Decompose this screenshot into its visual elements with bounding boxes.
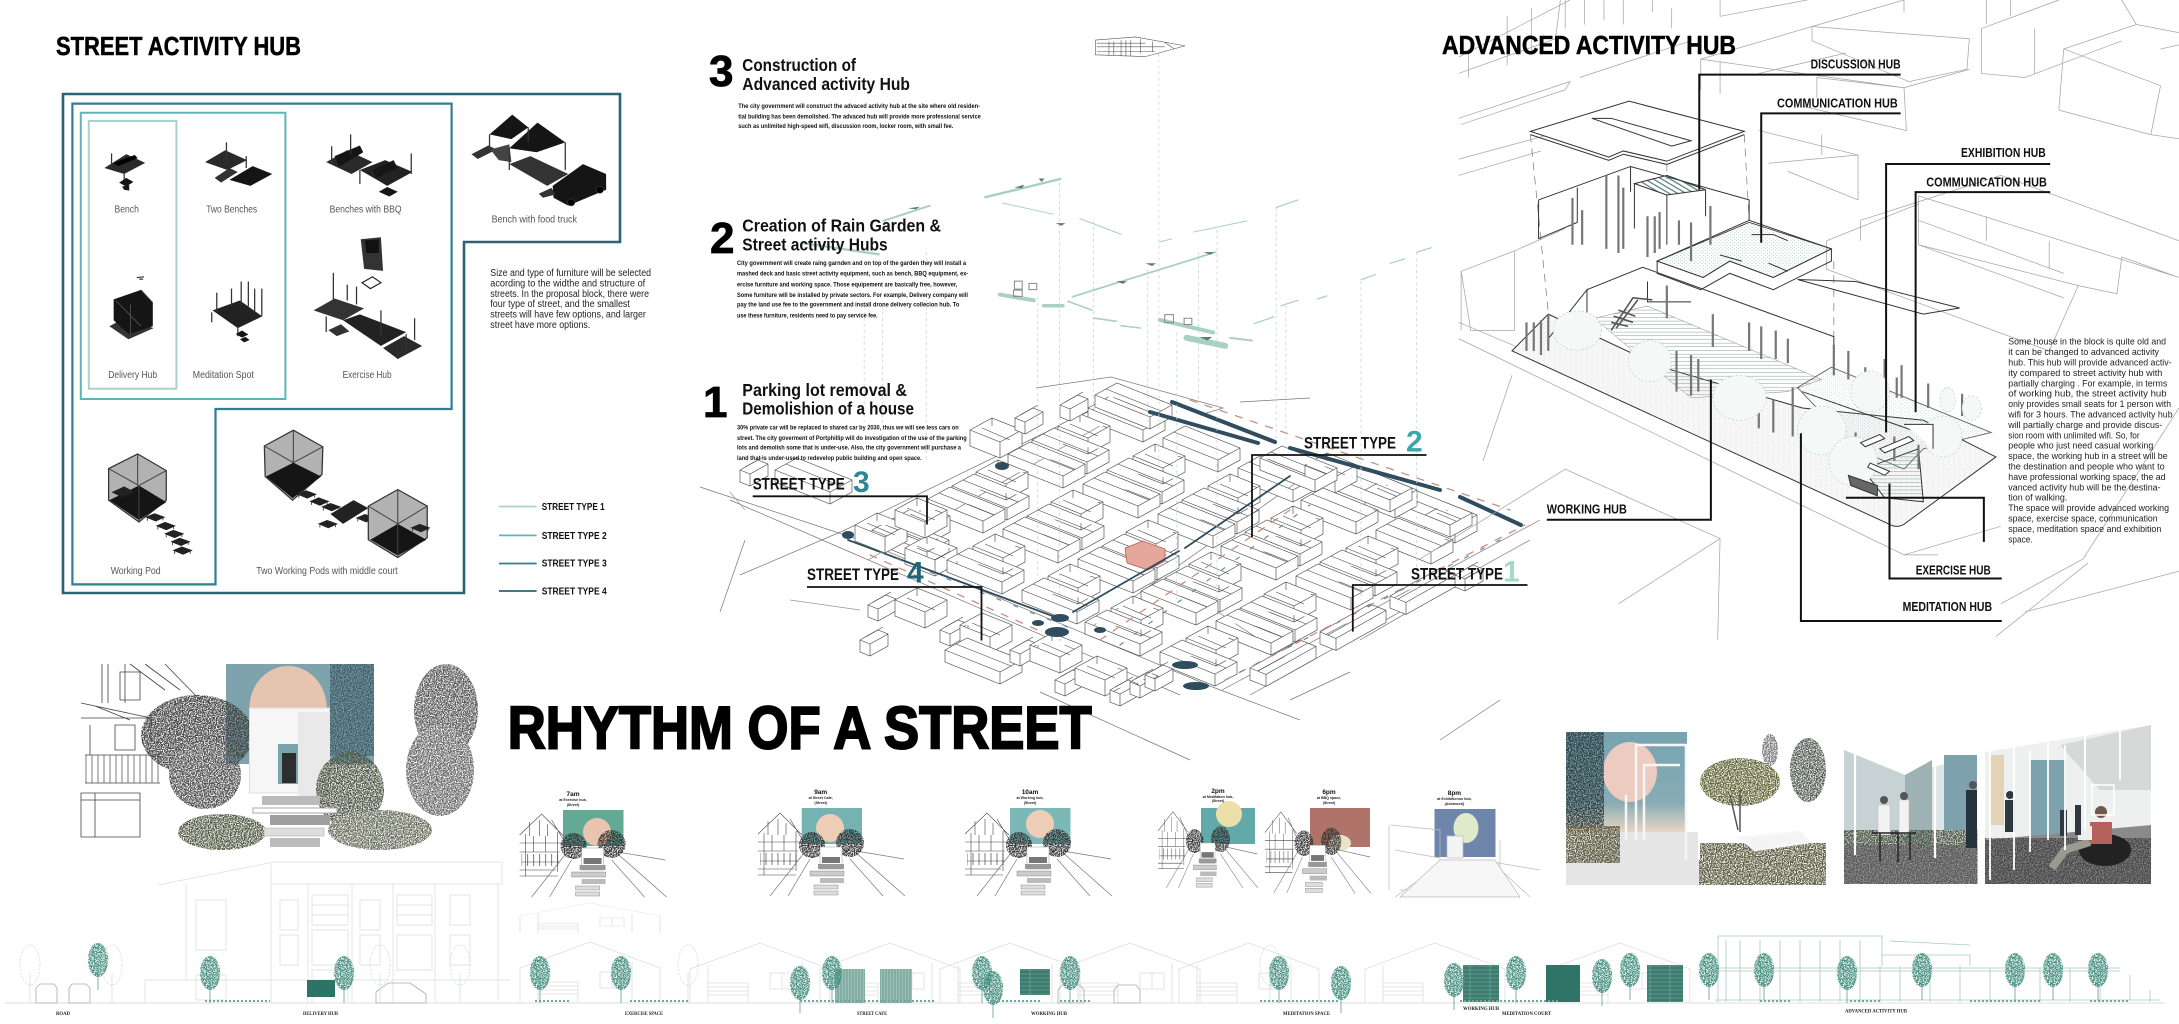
section labels: STREET CAFE bbox=[857, 1012, 888, 1017]
panel: street elevation bbox=[5, 862, 2165, 1018]
text block: advanced hub description: people who just need casual working bbox=[2008, 441, 2153, 451]
section labels: DELIVERY HUB bbox=[303, 1012, 339, 1017]
legend: street types bbox=[499, 501, 607, 598]
map ghost boundary and road lines bbox=[700, 377, 1540, 760]
callout: street type 1 bbox=[1353, 556, 1528, 632]
text block: advanced hub description bbox=[2007, 337, 2173, 544]
scene: 10am working hub: (Street) bbox=[1024, 801, 1037, 805]
parking road segments bbox=[848, 400, 1525, 680]
stairs bbox=[1611, 298, 1652, 330]
green garden strips bbox=[804, 179, 1431, 346]
buildings: western blocks bbox=[740, 383, 1172, 553]
callout: street type 4: 4 bbox=[907, 556, 924, 590]
trees bbox=[1553, 311, 1981, 486]
step 2: rain garden and street activity hubs: City government will create raing garnden and on top of the garden they will install a bbox=[737, 261, 967, 267]
upper floor walls and hatch box bbox=[1539, 166, 1960, 314]
hub callout labels: MEDITATION HUB bbox=[1903, 600, 1992, 614]
section labels: WORKING HUB bbox=[1463, 1007, 1500, 1012]
section labels: ADVANCED ACTIVITY HUB bbox=[1845, 1010, 1908, 1014]
step 3: construction of advanced activity hub: The city government will construct the advaced activity hub at the site where old residen- bbox=[738, 104, 980, 110]
text block: advanced hub description: the destination and people who want to bbox=[2008, 462, 2165, 472]
teal trees bbox=[88, 943, 2108, 1018]
step 2: rain garden and street activity hubs: pay the land use fee to the government and install drone delivery collecion hub. To bbox=[737, 303, 960, 309]
callout: street type 3: 3 bbox=[853, 466, 870, 499]
icon: delivery hub bbox=[109, 277, 154, 339]
text block: furniture selection: four type of street, and the smallest bbox=[490, 299, 630, 310]
text block: advanced hub description: vanced activity hub will be the destina- bbox=[2008, 482, 2161, 492]
text block: furniture selection: streets. In the proposal block, there were bbox=[490, 289, 649, 300]
panel: street type nested frames bbox=[63, 94, 620, 593]
text block: advanced hub description: Some house in the block is quite old and bbox=[2008, 337, 2166, 347]
text block: furniture selection: street have more options. bbox=[490, 320, 590, 331]
sky panel with peach arch bbox=[226, 664, 374, 764]
icon: exercise hub bbox=[314, 237, 422, 359]
text block: advanced hub description: it can be changed to advanced activity bbox=[2008, 347, 2159, 357]
step 2: rain garden and street activity hubs bbox=[710, 214, 968, 319]
small advanced hub at top bbox=[1095, 37, 1185, 57]
scene: 6pm bbq space: at BBQ space, bbox=[1317, 796, 1341, 800]
section labels: WORKING HUB bbox=[1031, 1012, 1068, 1017]
text block: furniture selection: acording to the widthe and structure of bbox=[490, 278, 645, 289]
dark columnar tree bbox=[330, 664, 374, 756]
buildings: eastern block rows bbox=[1085, 446, 1477, 686]
callout: street type 2: STREET TYPE bbox=[1304, 434, 1396, 453]
furniture bbox=[1720, 235, 1933, 496]
scene: 7am exercise hub: (Street) bbox=[567, 803, 580, 807]
scene: 9am street cafe: (Street) bbox=[814, 801, 828, 805]
icon labels: Working Pod bbox=[111, 566, 161, 577]
background figures bbox=[2005, 791, 2081, 836]
icon labels: Bench with food truck bbox=[492, 215, 578, 226]
step 1: parking lot removal and demolition bbox=[703, 378, 967, 462]
white frames and bench bbox=[1626, 745, 1810, 860]
section labels: ROAD bbox=[56, 1012, 70, 1017]
buildings: southern houses strip bbox=[860, 562, 1483, 706]
hub callout labels: DISCUSSION HUB bbox=[1811, 58, 1901, 72]
scene: 2pm meditation hub: 2pm bbox=[1211, 788, 1225, 795]
step 1: parking lot removal and demolition: street. The city goverment of Portphillip will do investigation of the use of the parking bbox=[737, 436, 967, 442]
text block: advanced hub description: wifi for 3 hours. The advanced activity hub bbox=[2007, 410, 2173, 420]
icon labels: Two Working Pods with middle court bbox=[256, 566, 398, 577]
icon labels: Meditation Spot bbox=[193, 370, 254, 381]
step 1: parking lot removal and demolition: Demolishion of a house bbox=[742, 399, 914, 419]
text block: advanced hub description: of working hub, the street activity hub bbox=[2008, 389, 2167, 399]
step 2: rain garden and street activity hubs: Street activity Hubs bbox=[742, 235, 888, 255]
panel: advanced activity hub axonometric bbox=[1420, 0, 2179, 640]
icon: two benches bbox=[205, 142, 272, 186]
step 2: rain garden and street activity hubs: Some furniture will be installed by private sectors. For example, Delivery company will bbox=[737, 293, 968, 299]
scene: 10am working hub: at Working hub, bbox=[1016, 796, 1044, 800]
scene: 2pm meditation hub bbox=[1158, 788, 1258, 888]
icon labels: Two Benches bbox=[206, 204, 257, 215]
icon: working pod bbox=[109, 454, 193, 555]
callout: street type 2 bbox=[1252, 426, 1426, 537]
scene: 6pm bbq space: (Street) bbox=[1323, 801, 1336, 805]
panel: isometric block map bbox=[700, 377, 1540, 760]
step 3: construction of advanced activity hub: Construction of bbox=[742, 55, 856, 75]
frame: street type 4 bbox=[63, 94, 620, 593]
image: advanced hub interior left bbox=[1844, 704, 1984, 884]
sky gradient bbox=[1566, 732, 1687, 833]
hub callout labels bbox=[1547, 58, 2047, 614]
icon: meditation spot bbox=[212, 282, 262, 342]
scene: 6pm bbq space bbox=[1265, 789, 1371, 893]
line-drawn neighbouring house bbox=[81, 664, 200, 837]
scene: 10am working hub bbox=[965, 789, 1112, 896]
ground floor walls and hatch bbox=[1548, 267, 1991, 502]
scene: 2pm meditation hub: at Meditation hub, bbox=[1203, 795, 1233, 799]
leader lines bbox=[1547, 75, 2050, 621]
icon: bench bbox=[104, 153, 145, 191]
dashed projection lines bbox=[1530, 135, 1834, 339]
callout: street type 3 bbox=[753, 466, 927, 524]
shrubs left bbox=[1566, 826, 1620, 863]
right grey tree bbox=[406, 664, 478, 816]
roof slab bbox=[1530, 101, 1744, 164]
step 2: rain garden and street activity hubs: 2 bbox=[710, 214, 734, 263]
text block: advanced hub description: space. bbox=[2008, 534, 2033, 544]
step 2: rain garden and street activity hubs: use these furniture, residents need to pay service fee. bbox=[737, 313, 878, 319]
step 2: rain garden and street activity hubs: mashed deck and basic street activity equipment, such as bench, BBQ equipment, ex- bbox=[737, 272, 968, 278]
hub callout labels: WORKING HUB bbox=[1547, 502, 1627, 516]
ground line bbox=[5, 1002, 2165, 1004]
section labels: EXERCISE SPACE bbox=[625, 1012, 664, 1017]
small hub models on layer bbox=[908, 178, 1214, 341]
step 3: construction of advanced activity hub bbox=[709, 47, 981, 130]
image: garden court collage bbox=[1566, 732, 1826, 885]
icon labels bbox=[108, 204, 578, 577]
scene: 9am street cafe: 9am bbox=[814, 789, 827, 796]
icon: bench with food truck bbox=[471, 115, 606, 206]
shrubs right bbox=[1699, 843, 1826, 885]
callout: street type 1: 1 bbox=[1503, 556, 1520, 589]
central grey tree bbox=[141, 695, 253, 809]
text block: advanced hub description: have professional working space, the ad bbox=[2008, 472, 2166, 482]
callout: street type 3: STREET TYPE bbox=[753, 475, 845, 494]
columns bbox=[1526, 175, 1962, 469]
red demolished house bbox=[1125, 541, 1165, 570]
text block: advanced hub description: partially charging . For example, in terms bbox=[2008, 378, 2168, 388]
callout: street type 4: STREET TYPE bbox=[807, 565, 899, 584]
scene: 8pm exhibition hub: 8pm bbox=[1448, 790, 1461, 797]
dark cypress bbox=[1566, 732, 1604, 828]
step 2: rain garden and street activity hubs: ercise furniture and working space. Those equipement are basically free, however, bbox=[737, 282, 958, 288]
houses bbox=[520, 903, 1690, 1003]
text block: advanced hub description: sion room with unlimited wifi. So, for bbox=[2008, 430, 2140, 440]
text block: advanced hub description: space, exercise space, communication bbox=[2008, 514, 2158, 524]
text block: advanced hub description: hub. This hub will provide advanced activ- bbox=[2008, 358, 2172, 368]
scene: 7am exercise hub: 7am bbox=[566, 791, 580, 798]
legend: street types: STREET TYPE 3 bbox=[542, 558, 607, 570]
scene: 2pm meditation hub: (Street) bbox=[1212, 799, 1225, 803]
callout: street type 4 bbox=[807, 556, 982, 640]
icon: two working pods with court bbox=[264, 430, 431, 558]
apartment building bbox=[145, 862, 510, 1003]
hub callout labels: EXHIBITION HUB bbox=[1961, 146, 2046, 160]
dotted upper terrace bbox=[1657, 222, 1831, 277]
vertical projection lines bbox=[864, 53, 1417, 600]
icon labels: Bench bbox=[114, 204, 139, 215]
scene: 8pm exhibition hub bbox=[1389, 790, 1540, 897]
low planting along the ground line bbox=[205, 1000, 2130, 1002]
white pavilion bbox=[250, 708, 330, 797]
scene: 7am exercise hub: at Exercise hub, bbox=[559, 798, 587, 802]
legend: street types: STREET TYPE 4 bbox=[542, 586, 607, 598]
frame: street type 1 bbox=[89, 121, 176, 389]
text block: advanced hub description: only provides small seats for 1 person with bbox=[2008, 399, 2171, 409]
ground floor gravel court bbox=[1512, 314, 1996, 526]
panel: exploded rain garden and hub layer bbox=[804, 37, 1431, 600]
step 1: parking lot removal and demolition: Parking lot removal & bbox=[742, 380, 907, 400]
legend: street types: STREET TYPE 2 bbox=[542, 530, 607, 542]
shrubs bbox=[178, 752, 432, 850]
callout: street type 1: STREET TYPE bbox=[1411, 565, 1503, 584]
advanced hub elevation bbox=[1712, 936, 2160, 1002]
section labels: MEDITATION SPACE bbox=[1283, 1012, 1331, 1017]
step 1: parking lot removal and demolition: lots and demolish some that is under-use. Also, the city government will purchase a bbox=[737, 446, 962, 452]
scene: 8pm exhibition hub: (Advanced) bbox=[1445, 802, 1465, 806]
icon: benches with bbq bbox=[326, 134, 412, 197]
callout: street type 2: 2 bbox=[1406, 426, 1423, 459]
section labels bbox=[56, 1007, 1908, 1017]
garden trees right bbox=[1700, 734, 1826, 832]
image: advanced hub interior right bbox=[1985, 725, 2151, 884]
hub callout labels: EXERCISE HUB bbox=[1916, 564, 1991, 578]
step 3: construction of advanced activity hub: such as unlimited high-speed wifi, discussion room, locker room, with small fee. bbox=[738, 124, 954, 130]
text block: furniture selection bbox=[490, 268, 651, 331]
text block: advanced hub description: space, meditation space and exhibition bbox=[2008, 524, 2161, 534]
hub callout labels: COMMUNICATION HUB bbox=[1777, 96, 1898, 110]
text block: advanced hub description: space, the working hub in a street will be bbox=[2008, 451, 2168, 461]
paving bbox=[1566, 832, 1700, 885]
text block: furniture selection: Size and type of furniture will be selected bbox=[490, 268, 651, 279]
intersection parking blobs bbox=[842, 462, 1209, 690]
icon labels: Benches with BBQ bbox=[330, 204, 402, 215]
text block: furniture selection: streets will have few options, and larger bbox=[490, 310, 646, 320]
text block: advanced hub description: The space will provide advanced working bbox=[2008, 503, 2169, 513]
scene: 6pm bbq space: 6pm bbox=[1322, 789, 1336, 796]
person with laptop on bean bag bbox=[2052, 806, 2131, 868]
icon labels: Delivery Hub bbox=[108, 370, 158, 381]
scene: 8pm exhibition hub: at Exhibitionon hub, bbox=[1437, 797, 1472, 801]
street hub panels bbox=[307, 965, 1683, 1003]
step 3: construction of advanced activity hub: Advanced activity Hub bbox=[742, 74, 910, 94]
buildings: central block rows bbox=[872, 396, 1315, 624]
step 3: construction of advanced activity hub: 3 bbox=[709, 47, 733, 96]
cars bbox=[36, 983, 1140, 1003]
scene: 9am street cafe bbox=[758, 789, 905, 896]
title: street activity hub: STREET ACTIVITY HUB bbox=[56, 31, 301, 61]
step 3: construction of advanced activity hub: tial building has been demolished. The advaced hub will provide more professional service bbox=[738, 114, 981, 120]
context buildings bbox=[1420, 0, 2179, 640]
step 1: parking lot removal and demolition: 1 bbox=[703, 378, 727, 427]
section labels: MEDITATION COURT bbox=[1502, 1012, 1552, 1017]
step 1: parking lot removal and demolition: land that is under-used to redevelop public building and open space. bbox=[737, 456, 922, 462]
hub callout labels: COMMUNICATION HUB bbox=[1926, 176, 2047, 190]
icon labels: Exercise Hub bbox=[343, 370, 392, 381]
scene: 7am exercise hub bbox=[520, 791, 667, 897]
title: advanced activity hub: ADVANCED ACTIVITY HUB bbox=[1442, 30, 1736, 60]
title: rhythm of a street: RHYTHM OF A STREET bbox=[508, 695, 1092, 762]
legend: street types: STREET TYPE 1 bbox=[542, 501, 605, 513]
scene: 10am working hub: 10am bbox=[1022, 789, 1039, 796]
step 1: parking lot removal and demolition: 30% private car will be replaced to shared car by 2030, thus we will see less cars on bbox=[737, 425, 959, 431]
frame: street type 2 bbox=[81, 113, 285, 399]
deck steps bbox=[253, 796, 337, 847]
frame: street type 3 bbox=[72, 104, 452, 584]
text block: advanced hub description: tion of walking. bbox=[2008, 493, 2067, 503]
text block: advanced hub description: will partially charge and provide discus- bbox=[2007, 420, 2162, 430]
text block: advanced hub description: ity compared to street activity hub with bbox=[2008, 368, 2162, 378]
step 2: rain garden and street activity hubs: Creation of Rain Garden & bbox=[742, 215, 941, 235]
panel: furniture icons bbox=[104, 115, 606, 558]
seated people bbox=[1872, 781, 1977, 862]
scene: 9am street cafe: at Street Cafe, bbox=[809, 796, 833, 800]
image: street hub hero rendering bbox=[81, 664, 478, 850]
light trees bbox=[20, 945, 1280, 1003]
